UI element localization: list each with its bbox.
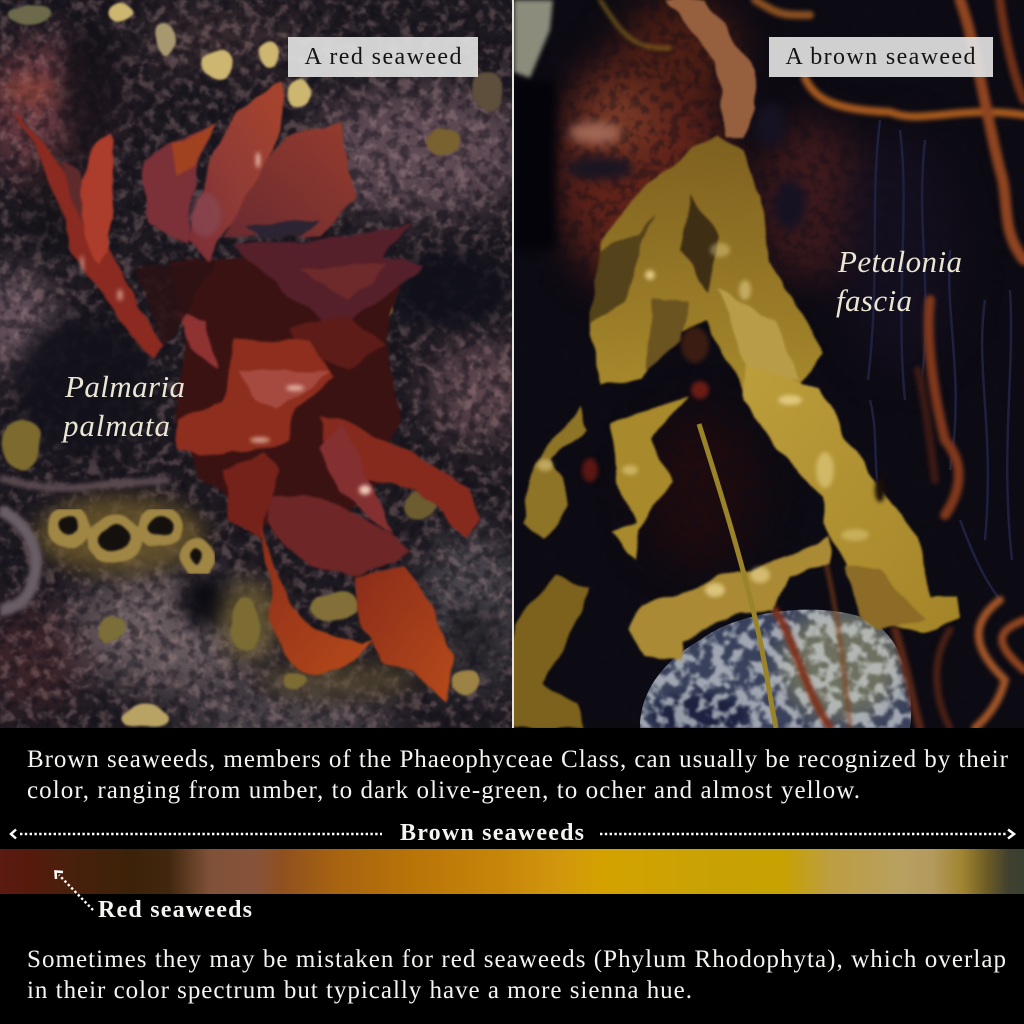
frond: middle strand [609, 397, 689, 561]
red seaweed: Palmaria palmata fronds [12, 82, 483, 702]
spectrum label: Brown seaweeds with range arrows: Brown seaweeds [400, 820, 584, 846]
dark central mass [170, 250, 400, 525]
frond: right leaf [225, 122, 355, 238]
intro paragraph: Brown seaweeds, members of the Phaeophyceae Class, can usually be recognized by their [27, 746, 1009, 773]
intro paragraph: color, ranging from umber, to dark olive-green, to ocher and almost yellow. [27, 777, 860, 804]
frond: main right limb [745, 364, 962, 631]
frond: large lower leaf [270, 494, 412, 575]
label: A brown seaweed [769, 37, 993, 77]
label: A red seaweed [288, 37, 478, 77]
brown seaweed: Petalonia fascia fronds [512, 133, 962, 728]
frond: left strand [520, 407, 589, 541]
barnacles and yellow shells [0, 3, 503, 727]
frond: middle stack [175, 338, 333, 455]
rocky shore background [0, 0, 530, 740]
highlights on brown seaweed [537, 243, 885, 597]
species name: Petalonia fascia: Petalonia [837, 244, 962, 279]
frond: left leaf [143, 125, 218, 245]
label: A red seaweed: A red seaweed [304, 44, 462, 70]
closing paragraph: in their color spectrum but typically have a more sienna hue. [27, 977, 692, 1004]
frond: center stem [135, 260, 215, 345]
panel: red seaweed photograph [0, 0, 530, 740]
frond: bottom-left blades [512, 577, 592, 728]
frond: far-left stem [12, 113, 165, 358]
frond: shadowed right leaves [235, 225, 423, 330]
frond: center leaf [187, 82, 281, 262]
frond: top mass [589, 133, 822, 400]
frond: lower crossing limb [629, 537, 829, 661]
frond: lower right blade [352, 566, 455, 702]
divider between photographs [512, 0, 514, 728]
spectrum label: Red seaweeds with pointer arrow: Red seaweeds [98, 897, 252, 923]
thin kelp stipe [699, 424, 776, 728]
fine dark strands on rock [868, 120, 1012, 600]
color spectrum bar [0, 849, 1024, 894]
highlights on seaweed [80, 152, 371, 495]
dark rock background [514, 0, 1024, 728]
label: A brown seaweed: A brown seaweed [786, 44, 976, 70]
frond: right upper tail [320, 415, 483, 537]
frond: left small blade [172, 312, 218, 370]
spectrum label: Red seaweeds with pointer arrow [56, 872, 252, 923]
species name: Petalonia fascia: fascia [836, 283, 912, 318]
closing paragraph: Sometimes they may be mistaken for red seaweeds (Phylum Rhodophyta), which overlap [27, 946, 1006, 973]
orange-brown strands [600, 0, 1024, 728]
species name: Palmaria palmata: Palmaria [64, 369, 185, 404]
species name: Palmaria palmata: palmata [61, 408, 170, 443]
grey boulders [514, 0, 920, 737]
frond: orange loop [258, 520, 372, 674]
translucent pink-brown ribbon above [665, 0, 757, 140]
panel: brown seaweed photograph [512, 0, 1024, 737]
spectrum label: Brown seaweeds with range arrows [11, 820, 1014, 846]
frond: shadow across leaves [245, 218, 320, 240]
